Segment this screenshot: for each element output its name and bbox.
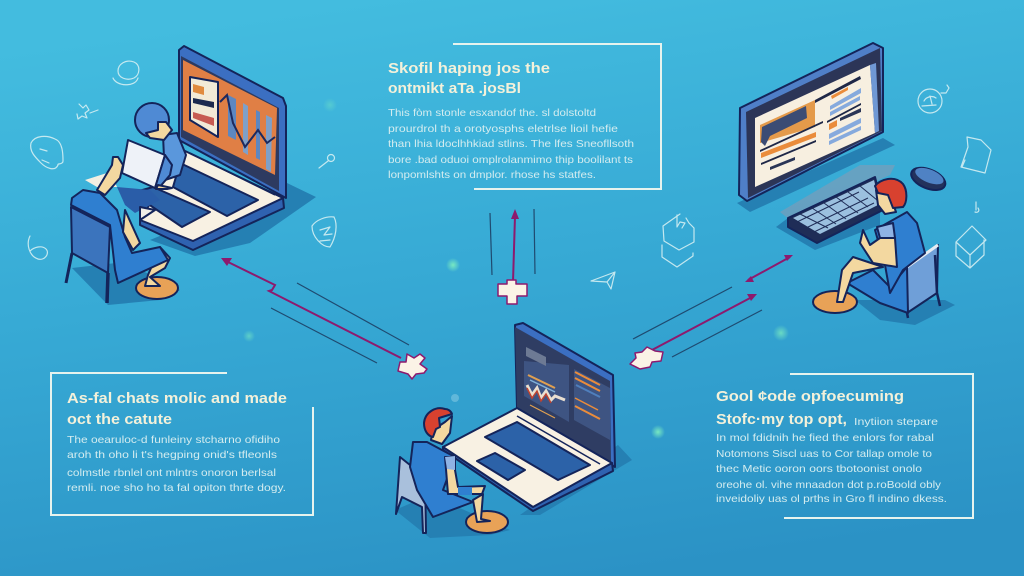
doodle icons — [28, 61, 336, 259]
heading — [67, 390, 287, 428]
laptop shadow — [150, 183, 316, 256]
chair shadow — [72, 262, 180, 305]
body text — [716, 416, 947, 505]
laptop screen chart — [183, 60, 277, 175]
laptop shadow — [520, 445, 632, 515]
body text: inveidoliy uas ol prths in Gro fl indino dkess. — [716, 493, 947, 505]
laptop lid — [179, 46, 286, 198]
mouse — [908, 163, 948, 194]
body text: colmstle rbnlel ont mlntrs onoron berlsal — [67, 467, 276, 479]
body text: Inytiion stepare — [854, 416, 938, 428]
heading: Stofc·my top opt, — [716, 411, 847, 428]
heading: Skofil haping jos the — [388, 60, 550, 77]
arrow: right diagonal — [630, 287, 762, 369]
body text — [388, 107, 634, 181]
heading — [716, 388, 904, 428]
heading: As-fal chats molic and made — [67, 390, 287, 407]
illustration: right monitor with person — [591, 43, 991, 325]
keyboard — [780, 165, 895, 243]
monitor screen — [755, 63, 879, 187]
laptop screen chart — [524, 347, 610, 440]
laptop lid — [515, 323, 615, 467]
heading: ontmikt aTa .josBl — [388, 80, 521, 97]
keyboard shadow — [776, 200, 880, 250]
person — [396, 408, 508, 533]
laptop base — [443, 447, 613, 511]
heading — [388, 60, 550, 97]
body text: Notomons Siscl uas to Cor tallap omole to — [716, 448, 932, 460]
body text — [67, 434, 286, 494]
doodle icons — [591, 85, 991, 289]
arrow: small double-headed right — [745, 255, 793, 282]
illustration: bottom laptop with person — [395, 323, 632, 538]
body text: aroh th oho li t's hegping onid's tfleonls — [67, 449, 277, 461]
monitor shadow — [737, 138, 895, 212]
heading: Gool ¢ode opfoecuming — [716, 388, 904, 405]
keyboard panels — [173, 163, 258, 216]
person — [813, 179, 940, 318]
body text: oreohe ol. vihe mnaadon dot p.roBoold obly — [716, 479, 942, 491]
chair shadow — [395, 495, 510, 538]
keyboard panels — [485, 422, 590, 480]
laptop base — [140, 198, 284, 250]
chair — [66, 190, 178, 303]
person — [85, 103, 186, 220]
illustration: left laptop with person — [28, 46, 336, 305]
panel: top centre text — [388, 44, 661, 189]
arrow: centre vertical — [490, 209, 535, 304]
heading: oct the catute — [67, 411, 172, 428]
body text: thec Metic ooron oors tbotoonist onolo — [716, 463, 922, 475]
decorative glows — [243, 98, 789, 439]
panel: bottom right text — [716, 374, 973, 518]
body text: lonpomlshts on dmplor. rhose hs statfes. — [388, 169, 596, 181]
panel: bottom left text — [51, 373, 313, 515]
body text: than lhia ldoclhhkiad stlins. The lfes Sneofllsoth — [388, 138, 634, 150]
body text: prourdrol th a orotyosphs eletrlse lioil hefie — [388, 123, 618, 135]
body text: In mol fdidnih he fied the enlors for rabal — [716, 432, 934, 444]
body text: remli. noe sho ho ta fal opiton thrte dogy. — [67, 482, 286, 494]
body text: The oearuloc-d funleiny stcharno ofidiho — [67, 434, 280, 446]
body text: bore .bad oduoi omplrolanmimo thip boolilant ts — [388, 154, 633, 166]
monitor frame — [739, 43, 883, 201]
chair shadow — [855, 300, 955, 325]
body text: This fòm stonle esxandof the. sl dolstoltd — [388, 107, 596, 119]
arrow: left diagonal — [221, 258, 427, 379]
